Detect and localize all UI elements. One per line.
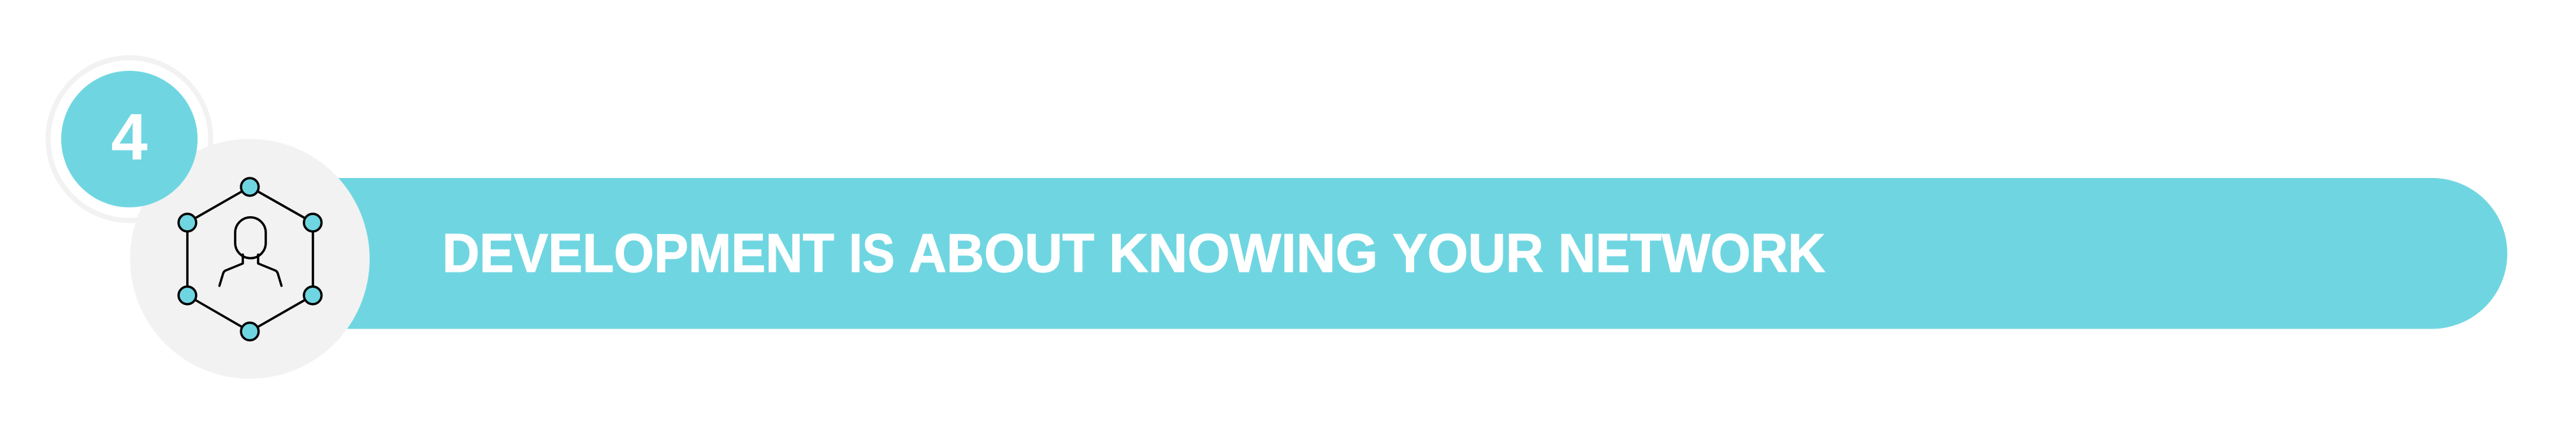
icon background circle xyxy=(130,139,370,379)
heading text: NETWORK xyxy=(1558,223,1825,284)
hexagon connecting lines xyxy=(187,187,313,332)
heading text: ABOUT xyxy=(909,223,1094,284)
heading text: YOUR xyxy=(1393,223,1544,284)
number badge outer ring xyxy=(48,57,210,221)
heading text xyxy=(442,223,1825,284)
heading text: IS xyxy=(849,223,895,284)
heading text: DEVELOPMENT xyxy=(442,223,834,284)
icon: person in network hexagon xyxy=(178,178,322,340)
network nodes xyxy=(178,178,322,340)
heading text: KNOWING xyxy=(1109,223,1378,284)
heading banner bar xyxy=(287,178,2507,329)
number badge: 4 xyxy=(111,100,148,174)
person head xyxy=(235,218,266,258)
number badge xyxy=(61,71,198,207)
person shoulders xyxy=(219,255,282,286)
